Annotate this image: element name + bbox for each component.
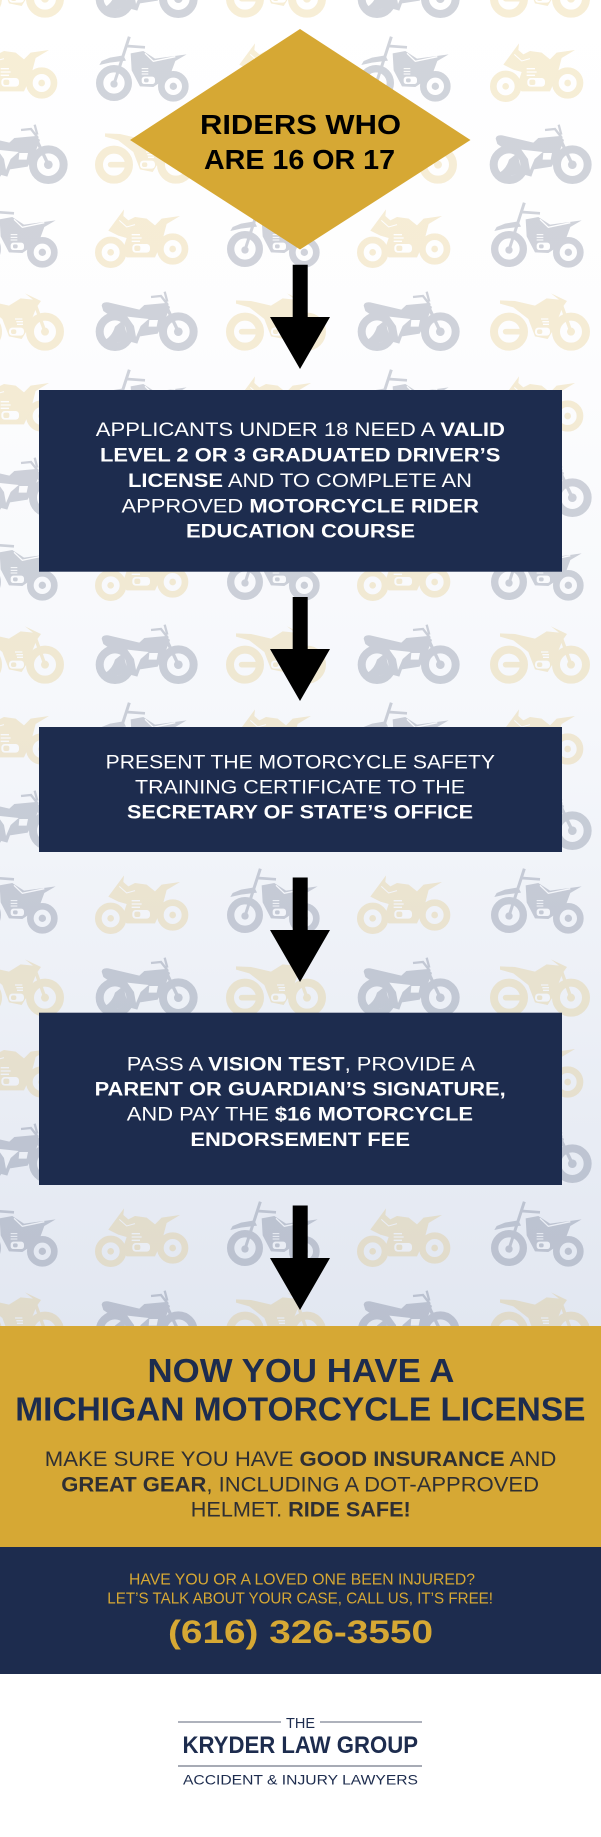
panel: now you have a license: NOW YOU HAVE A: [148, 1352, 454, 1389]
panel: now you have a license: MAKE SURE YOU HAVE GOOD INSURANCE AND: [45, 1448, 556, 1471]
panel: step 1: [39, 390, 562, 572]
logo: The Kryder Law Group: ACCIDENT & INJURY LAWYERS: [183, 1772, 418, 1788]
arrow 3: [270, 878, 330, 982]
panel: step 1: LEVEL 2 OR 3 GRADUATED DRIVER’S: [100, 446, 500, 466]
panel: step 1: EDUCATION COURSE: [186, 522, 415, 543]
diamond: riders who are 16 or 17: RIDERS WHO: [200, 109, 401, 140]
panel: step 3: PASS A VISION TEST , PROVIDE A: [127, 1054, 475, 1075]
panel: call to action: HAVE YOU OR A LOVED ONE BEEN INJURED?: [129, 1571, 475, 1588]
panel: step 2: PRESENT THE MOTORCYCLE SAFETY: [106, 752, 495, 774]
background gradient: [0, 0, 601, 1330]
panel: step 3: ENDORSEMENT FEE: [190, 1130, 410, 1151]
panel: now you have a license: GREAT GEAR , INCLUDING A DOT-APPROVED: [61, 1474, 539, 1496]
arrow 4: [270, 1206, 330, 1310]
panel: step 3: [39, 1013, 562, 1185]
diamond: riders who are 16 or 17: ARE 16 OR 17: [204, 144, 395, 175]
panel: now you have a license: HELMET. RIDE SAFE!: [191, 1498, 411, 1522]
panel: step 1: APPLICANTS UNDER 18 NEED A VALID: [96, 420, 505, 441]
panel: step 3: AND PAY THE $16 MOTORCYCLE: [127, 1104, 473, 1125]
panel: call to action: (616) 326-3550: [168, 1614, 433, 1650]
panel: step 1: LICENSE AND TO COMPLETE AN: [128, 471, 472, 492]
diamond: riders who are 16 or 17: [130, 29, 470, 250]
panel: step 2: SECRETARY OF STATE’S OFFICE: [127, 802, 473, 824]
logo: The Kryder Law Group: KRYDER LAW GROUP: [182, 1732, 418, 1759]
panel: now you have a license: [0, 1326, 601, 1547]
panel: call to action: [0, 1547, 601, 1674]
arrow 1: [270, 265, 330, 369]
panel: now you have a license: MICHIGAN MOTORCYCLE LICENSE: [15, 1391, 586, 1428]
motorcycle pattern background: [0, 0, 588, 1346]
arrow 2: [270, 597, 330, 701]
panel: step 2: [39, 727, 562, 852]
panel: step 2: TRAINING CERTIFICATE TO THE: [135, 778, 465, 798]
logo: The Kryder Law Group: [0, 1674, 601, 1837]
panel: call to action: LET’S TALK ABOUT YOUR CASE, CALL US, IT’S FREE!: [107, 1590, 493, 1608]
panel: step 3: PARENT OR GUARDIAN’S SIGNATURE,: [95, 1079, 506, 1100]
panel: step 1: APPROVED MOTORCYCLE RIDER: [122, 496, 479, 517]
logo: The Kryder Law Group: THE: [286, 1716, 315, 1732]
